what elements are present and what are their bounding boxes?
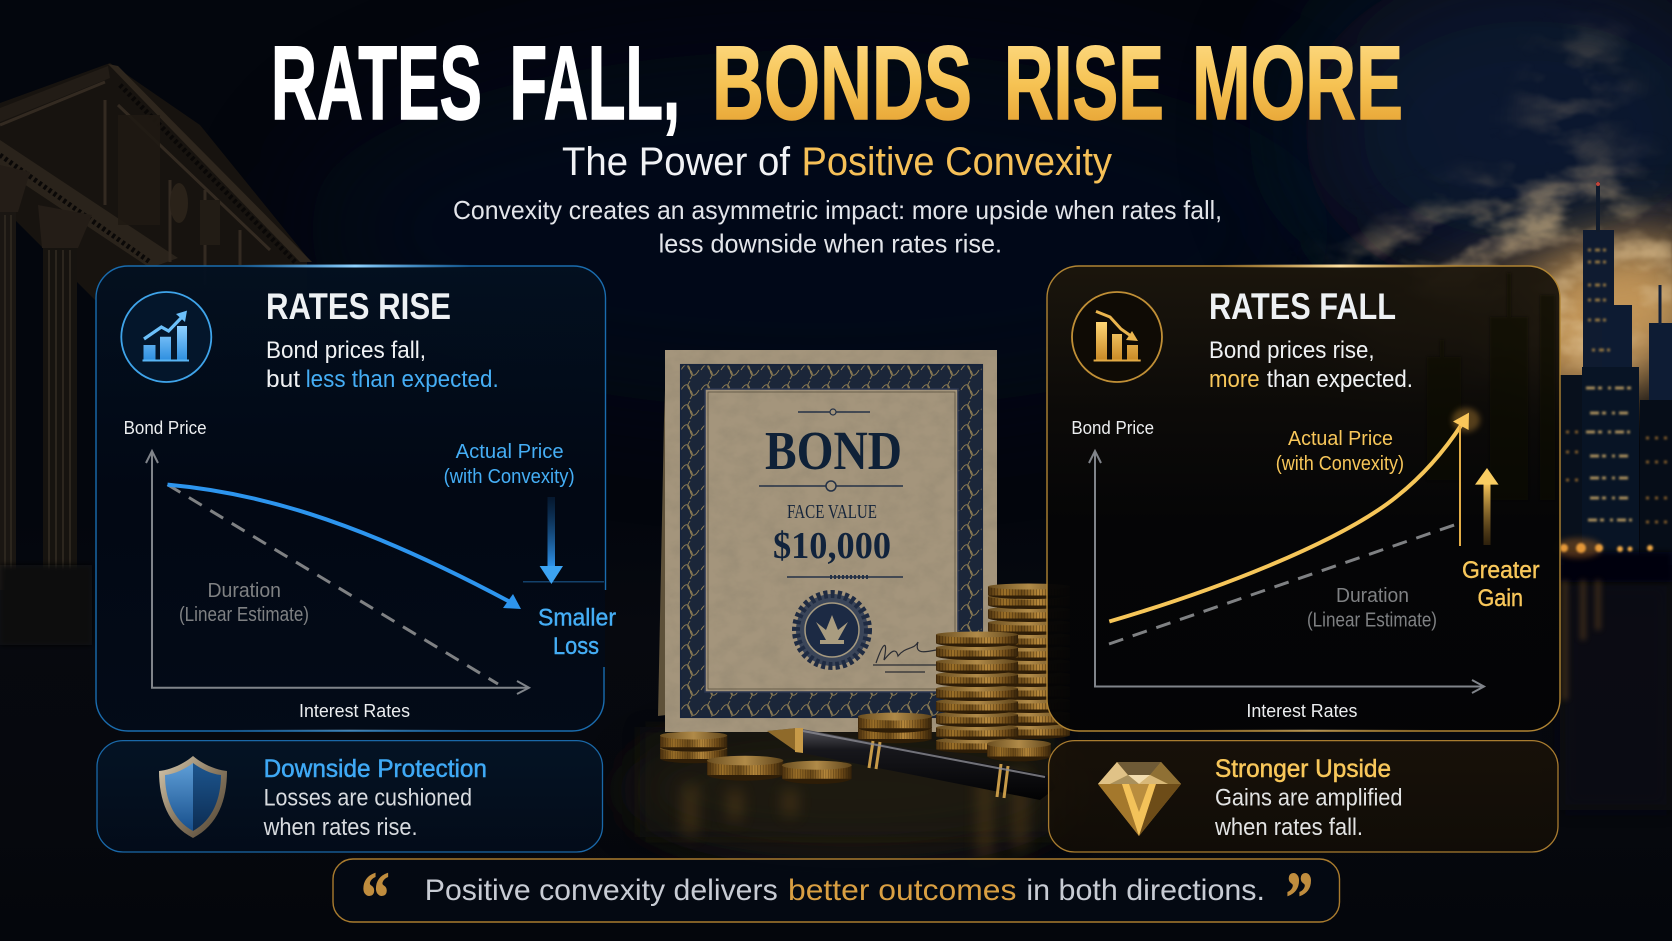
heading: rates fall: RATES FALL (1209, 286, 1396, 327)
chart: rates rise: Bond Price (124, 418, 207, 438)
text: rates fall description: more (1209, 366, 1260, 393)
title: RISE (1004, 25, 1164, 142)
label: duration: Duration (208, 579, 281, 602)
label: greater gain: Greater (1462, 557, 1540, 584)
text: intro description: Convexity creates an asymmetric impact: more upside when rates fall, (453, 195, 1222, 225)
text: takeaway: in both directions. (1026, 874, 1265, 907)
text: downside protection: Losses are cushioned (264, 785, 472, 812)
subtitle (562, 140, 1112, 184)
text: rates rise description: Bond prices fall, (266, 337, 426, 364)
label: greater gain: Gain (1478, 585, 1523, 612)
label: duration: (Linear Estimate) (1307, 610, 1437, 632)
label: duration (179, 579, 309, 626)
label: actual price: Actual Price (1288, 428, 1393, 450)
text: takeaway: Positive convexity delivers (425, 874, 778, 907)
bond heading: BOND (765, 420, 902, 481)
icon: closing quote: ” (1286, 857, 1313, 938)
subtitle: The Power of (562, 140, 791, 184)
label: greater gain (1462, 557, 1540, 612)
label: smaller loss: Loss (553, 633, 599, 660)
label: smaller loss (538, 604, 616, 660)
chart: rates rise (124, 418, 616, 721)
icon: diamond (1098, 762, 1181, 836)
callout: key takeaway (333, 857, 1340, 938)
face value: FACE VALUE (787, 501, 877, 523)
label: smaller loss: Smaller (538, 604, 616, 631)
background: city skyline (1554, 182, 1672, 700)
chart: rates rise: Interest Rates (299, 701, 410, 721)
title (271, 25, 1403, 142)
label: duration: Duration (1336, 584, 1409, 607)
text: intro description (453, 195, 1222, 259)
title: RATES (271, 25, 482, 142)
arrow: greater gain (1475, 468, 1499, 545)
text: downside protection (263, 785, 472, 841)
text: rates rise description (266, 337, 499, 393)
heading: downside protection: Downside Protection (264, 755, 487, 783)
panel: rates rise (96, 264, 616, 732)
text: intro description: less downside when rates rise. (659, 229, 1002, 259)
label: actual price (1276, 428, 1404, 475)
pen (767, 728, 1056, 800)
coin stacks (936, 584, 1070, 753)
label: actual price (444, 441, 575, 488)
title: FALL, (510, 25, 680, 142)
heading: rates rise: RATES RISE (266, 286, 451, 327)
panel: downside protection (97, 741, 602, 852)
chart: rates fall (1071, 408, 1540, 721)
text: rates fall description: Bond prices rise, (1209, 337, 1375, 364)
illustration: bond certificate with coins and pen (630, 350, 1070, 860)
amount: $10,000 (773, 525, 891, 567)
text: downside protection: when rates rise. (263, 814, 418, 841)
subtitle: Positive Convexity (802, 140, 1112, 184)
text: stronger upside: when rates fall. (1214, 814, 1363, 841)
loose coins (660, 713, 1051, 784)
icon: shield (159, 756, 227, 838)
title: MORE (1192, 25, 1403, 142)
chart: rates fall: Interest Rates (1246, 701, 1357, 721)
background: night scene (394, 0, 1672, 808)
label: actual price: Actual Price (456, 441, 564, 463)
icon: falling bar chart (1072, 292, 1162, 382)
panel: stronger upside (1049, 741, 1558, 852)
arrow: smaller loss (523, 497, 604, 584)
text: takeaway (425, 874, 1265, 907)
icon: rising bar chart (121, 292, 211, 382)
signature (873, 642, 936, 672)
text: rates fall description (1209, 337, 1413, 393)
text: takeaway: better outcomes (788, 874, 1016, 907)
heading: stronger upside: Stronger Upside (1215, 755, 1391, 783)
text: stronger upside: Gains are amplified (1215, 785, 1402, 812)
text: stronger upside (1214, 785, 1402, 841)
label: actual price: (with Convexity) (1276, 453, 1404, 475)
icon: opening quote: “ (361, 857, 390, 938)
title: BONDS (712, 25, 972, 142)
text: rates fall description: than expected. (1267, 366, 1413, 393)
label: duration (1307, 584, 1437, 632)
text: rates rise description: less than expected. (306, 366, 499, 393)
text: rates rise description: but (266, 366, 300, 393)
bond paper (658, 350, 997, 732)
label: actual price: (with Convexity) (444, 466, 575, 488)
chart: rates fall: Bond Price (1071, 418, 1154, 438)
panel: rates fall (1047, 264, 1560, 732)
label: duration: (Linear Estimate) (179, 604, 309, 626)
background: classical building (0, 63, 312, 645)
seal (796, 594, 868, 666)
